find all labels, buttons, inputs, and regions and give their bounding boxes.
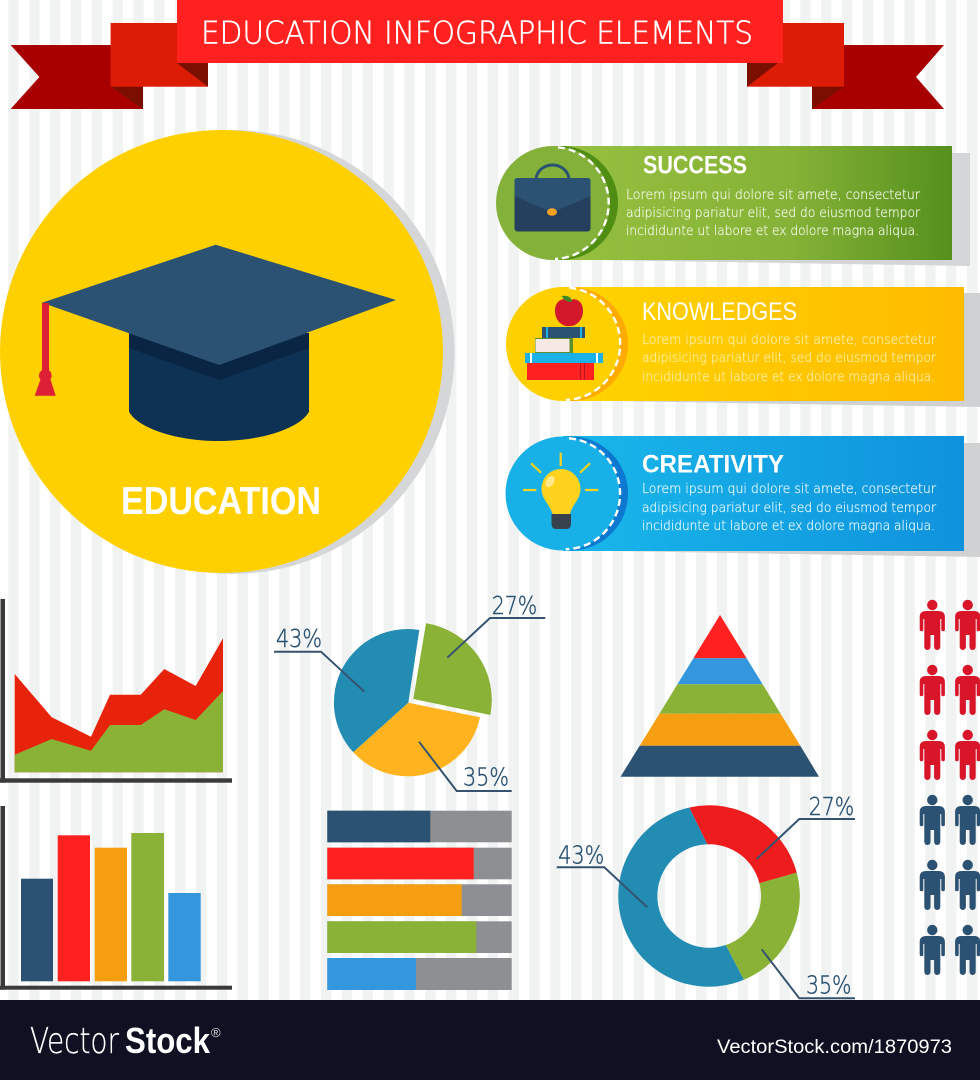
donut label 35: 35% [806, 970, 852, 999]
pie chart [274, 591, 545, 792]
creativity heading: CREATIVITY [642, 450, 784, 478]
donut label 27: 27% [809, 792, 854, 821]
bar chart [0, 806, 232, 990]
title ribbon [11, 0, 944, 109]
footer bar [0, 1000, 980, 1080]
pie label 27: 27% [492, 591, 537, 620]
footer image id: VectorStock.com/1870973 [717, 1037, 952, 1058]
success text: adipisicing pariatur elit, sed do eiusmod tempor [626, 206, 921, 221]
education label: EDUCATION [121, 480, 321, 523]
pie label 35: 35% [463, 763, 509, 792]
icon: briefcase [514, 165, 590, 232]
donut label 43: 43% [558, 840, 604, 869]
knowledges text [642, 333, 937, 385]
knowledges heading: KNOWLEDGES [642, 298, 797, 326]
success text: Lorem ipsum qui dolore sit amete, consectetur [626, 188, 921, 203]
success text [626, 188, 921, 239]
panel: creativity card [506, 436, 980, 557]
pyramid chart [620, 615, 819, 777]
panel: knowledges card [506, 287, 980, 407]
panel: success card [496, 146, 970, 266]
stacked horizontal bars [327, 811, 512, 990]
area chart [0, 599, 232, 783]
knowledges text: Lorem ipsum qui dolore sit amete, consectetur [642, 333, 937, 348]
creativity text: incididunte ut labore et ex dolore magna aliqua. [642, 519, 935, 534]
icon: light bulb [523, 453, 598, 529]
creativity text: adipisicing pariatur elit, sed do eiusmod tempor [642, 501, 937, 516]
creativity text [642, 482, 937, 534]
icon: books and apple [525, 296, 603, 380]
icon array: people [920, 600, 980, 975]
creativity text: Lorem ipsum qui dolore sit amete, consectetur [642, 482, 937, 497]
footer logo word two: Stock [125, 1020, 211, 1061]
donut chart [557, 792, 855, 999]
pie label 43: 43% [276, 624, 322, 653]
footer logo word one: Vector [30, 1021, 119, 1062]
footer registered mark: ® [211, 1025, 221, 1040]
knowledges text: incididunte ut labore et ex dolore magna aliqua. [642, 370, 935, 385]
success text: incididunte ut labore et ex dolore magna aliqua. [626, 224, 919, 239]
knowledges text: adipisicing pariatur elit, sed do eiusmod tempor [642, 351, 937, 366]
icon: graduation cap [35, 245, 396, 441]
title text: EDUCATION INFOGRAPHIC ELEMENTS [201, 15, 753, 51]
success heading: SUCCESS [643, 152, 747, 180]
panel: education circle [0, 130, 454, 574]
